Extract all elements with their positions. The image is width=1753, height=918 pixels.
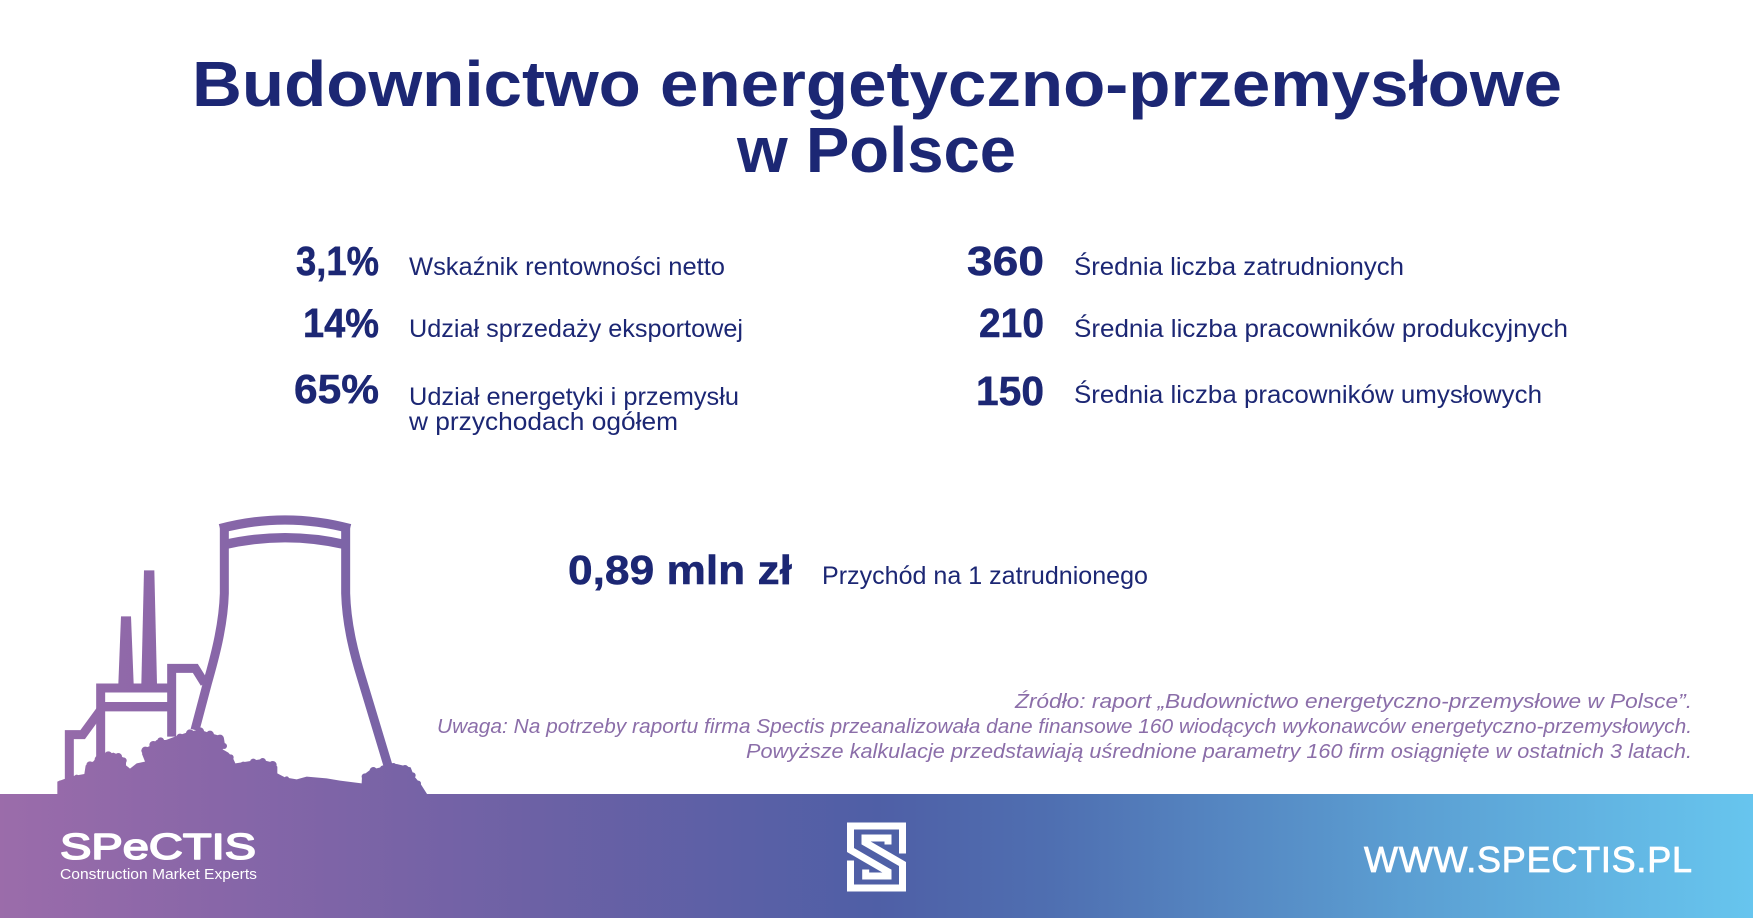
stat: liczba zatrudnionych: Średnia liczba zatrudnionych (1074, 251, 1404, 281)
title: w Polsce (736, 114, 1016, 186)
stat: liczba zatrudnionych: 360 (967, 238, 1044, 284)
stat: energetyka i przemysł (294, 366, 739, 436)
footer band (0, 794, 1753, 918)
website address: WWW.SPECTIS.PL (1364, 839, 1692, 880)
stat: sprzedaż eksportowa (303, 300, 743, 346)
source note: Źródło: raport „Budownictwo energetyczno-przemysłowe w Polsce”. (1014, 690, 1692, 713)
logo: Spectis wordmark: Construction Market Experts (60, 866, 257, 883)
stat: pracownicy produkcyjni (979, 300, 1568, 346)
source note: Powyższe kalkulacje przedstawiają uśrednione parametry 160 firm osiągnięte w ostatnich 3 latach. (746, 741, 1692, 763)
title: Budownictwo energetyczno-przemysłowe (192, 48, 1562, 120)
stat: pracownicy produkcyjni: 210 (979, 300, 1044, 346)
stat: sprzedaż eksportowa: 14% (303, 300, 379, 346)
source note (437, 690, 1692, 763)
logo: Spectis wordmark: SPeCTIS (60, 826, 256, 867)
stat: rentowność netto (296, 238, 725, 284)
stat: pracownicy umysłowi (976, 368, 1542, 414)
source note: Uwaga: Na potrzeby raportu firma Spectis przeanalizowała dane finansowe 160 wiodących wykonawców energetyczno-przemysłowych. (437, 716, 1692, 738)
logo: Spectis wordmark (60, 826, 257, 883)
stat: przychód na zatrudnionego: Przychód na 1 zatrudnionego (822, 562, 1148, 590)
stat: rentowność netto: 3,1% (296, 238, 379, 284)
stat: pracownicy umysłowi: Średnia liczba pracowników umysłowych (1074, 379, 1542, 409)
stat: energetyka i przemysł: w przychodach ogółem (408, 408, 678, 436)
stat: sprzedaż eksportowa: Udział sprzedaży eksportowej (409, 315, 743, 343)
icon: power plant illustration (57, 520, 428, 795)
stat: przychód na zatrudnionego (568, 547, 1148, 593)
stat: energetyka i przemysł: 65% (294, 366, 379, 412)
stat: energetyka i przemysł: Udział energetyki i przemysłu (409, 383, 739, 411)
stat: pracownicy produkcyjni: Średnia liczba pracowników produkcyjnych (1074, 313, 1568, 343)
stat: rentowność netto: Wskaźnik rentowności netto (409, 253, 725, 281)
stat: liczba zatrudnionych (967, 238, 1404, 284)
stat: przychód na zatrudnionego: 0,89 mln zł (568, 547, 793, 593)
icon: Spectis S emblem (850, 826, 902, 888)
title (192, 48, 1562, 186)
stat: pracownicy umysłowi: 150 (976, 368, 1044, 414)
